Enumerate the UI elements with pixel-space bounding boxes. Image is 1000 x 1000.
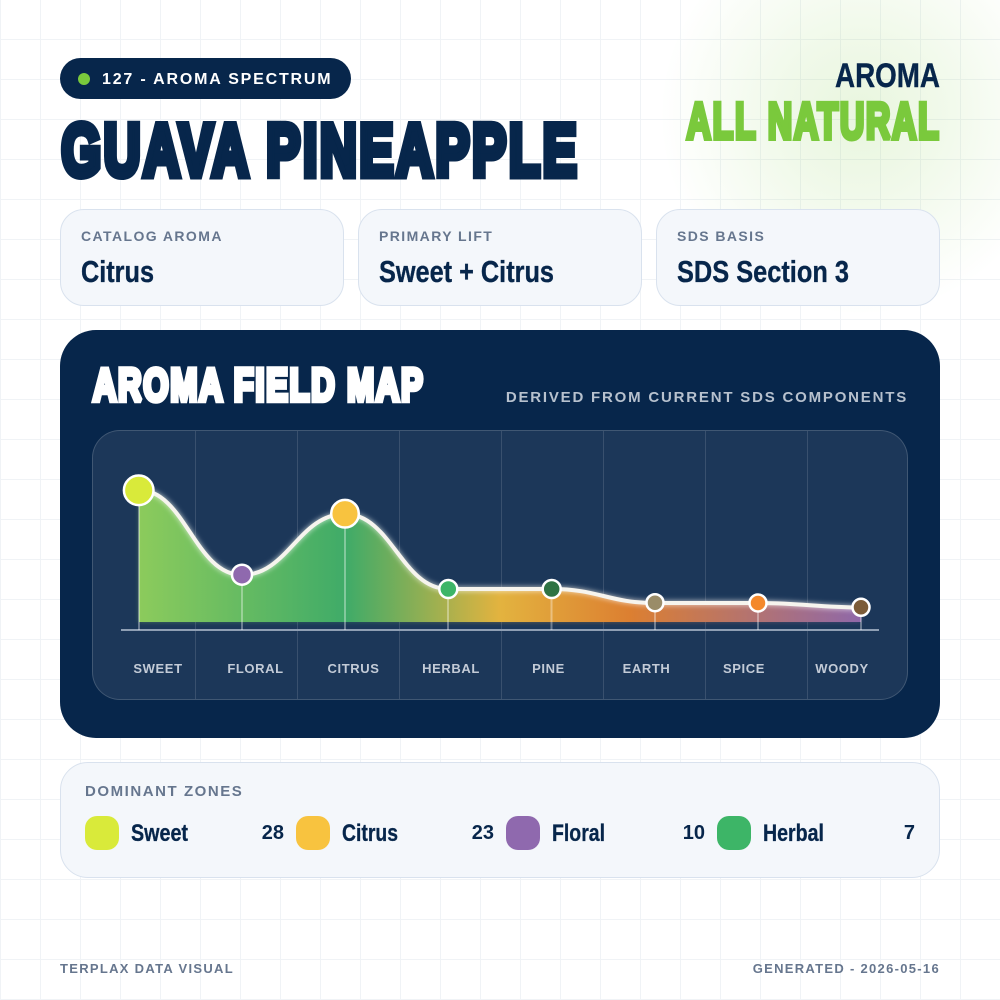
curve line: [139, 490, 861, 608]
card value: Citrus: [81, 254, 154, 289]
name: Floral: [552, 820, 605, 847]
value: 10: [683, 822, 705, 844]
chart panel: [92, 430, 908, 700]
name: Citrus: [342, 820, 398, 847]
area fill: [139, 490, 861, 622]
value: 28: [262, 822, 284, 844]
icon: green dot: [78, 73, 90, 85]
label: earth: EARTH: [623, 661, 670, 676]
label: floral: FLORAL: [227, 661, 284, 676]
label: citrus: CITRUS: [328, 661, 380, 676]
dominant zones heading: DOMINANT ZONES: [85, 783, 243, 800]
panel subtitle: DERIVED FROM CURRENT SDS COMPONENTS: [506, 389, 908, 406]
card: catalog aroma: [60, 209, 344, 306]
swatch: [506, 816, 540, 850]
axis line: [121, 629, 879, 631]
name: Herbal: [763, 820, 824, 847]
data points: [124, 476, 869, 616]
footer right: GENERATED - 2026-05-16: [753, 961, 940, 976]
card: primary lift: [358, 209, 642, 306]
label: spice: SPICE: [723, 661, 765, 676]
card label: PRIMARY LIFT: [379, 228, 493, 244]
card label: SDS BASIS: [677, 228, 765, 244]
label: woody: WOODY: [815, 661, 869, 676]
panel: dominant zones: [60, 762, 940, 878]
swatch: [85, 816, 119, 850]
label: herbal: HERBAL: [422, 661, 480, 676]
card value: SDS Section 3: [677, 254, 849, 289]
card: sds basis: [656, 209, 940, 306]
aroma label: AROMA: [835, 57, 940, 95]
name: Sweet: [131, 820, 188, 847]
swatch: [296, 816, 330, 850]
card label: CATALOG AROMA: [81, 228, 223, 244]
label: sweet: SWEET: [133, 661, 183, 676]
label: pine: PINE: [532, 661, 565, 676]
panel heading: AROMA FIELD MAP: [93, 360, 424, 410]
stem lines: [139, 490, 861, 630]
footer left: TERPLAX DATA VISUAL: [60, 961, 234, 976]
swatch: [717, 816, 751, 850]
card value: Sweet + Citrus: [379, 254, 554, 289]
badge text: 127 - AROMA SPECTRUM: [102, 70, 332, 88]
value: 23: [472, 822, 494, 844]
title: GUAVA PINEAPPLE: [62, 110, 580, 191]
value: 7: [904, 822, 915, 844]
panel: aroma field map: [60, 330, 940, 738]
badge: aroma spectrum: [60, 58, 351, 99]
